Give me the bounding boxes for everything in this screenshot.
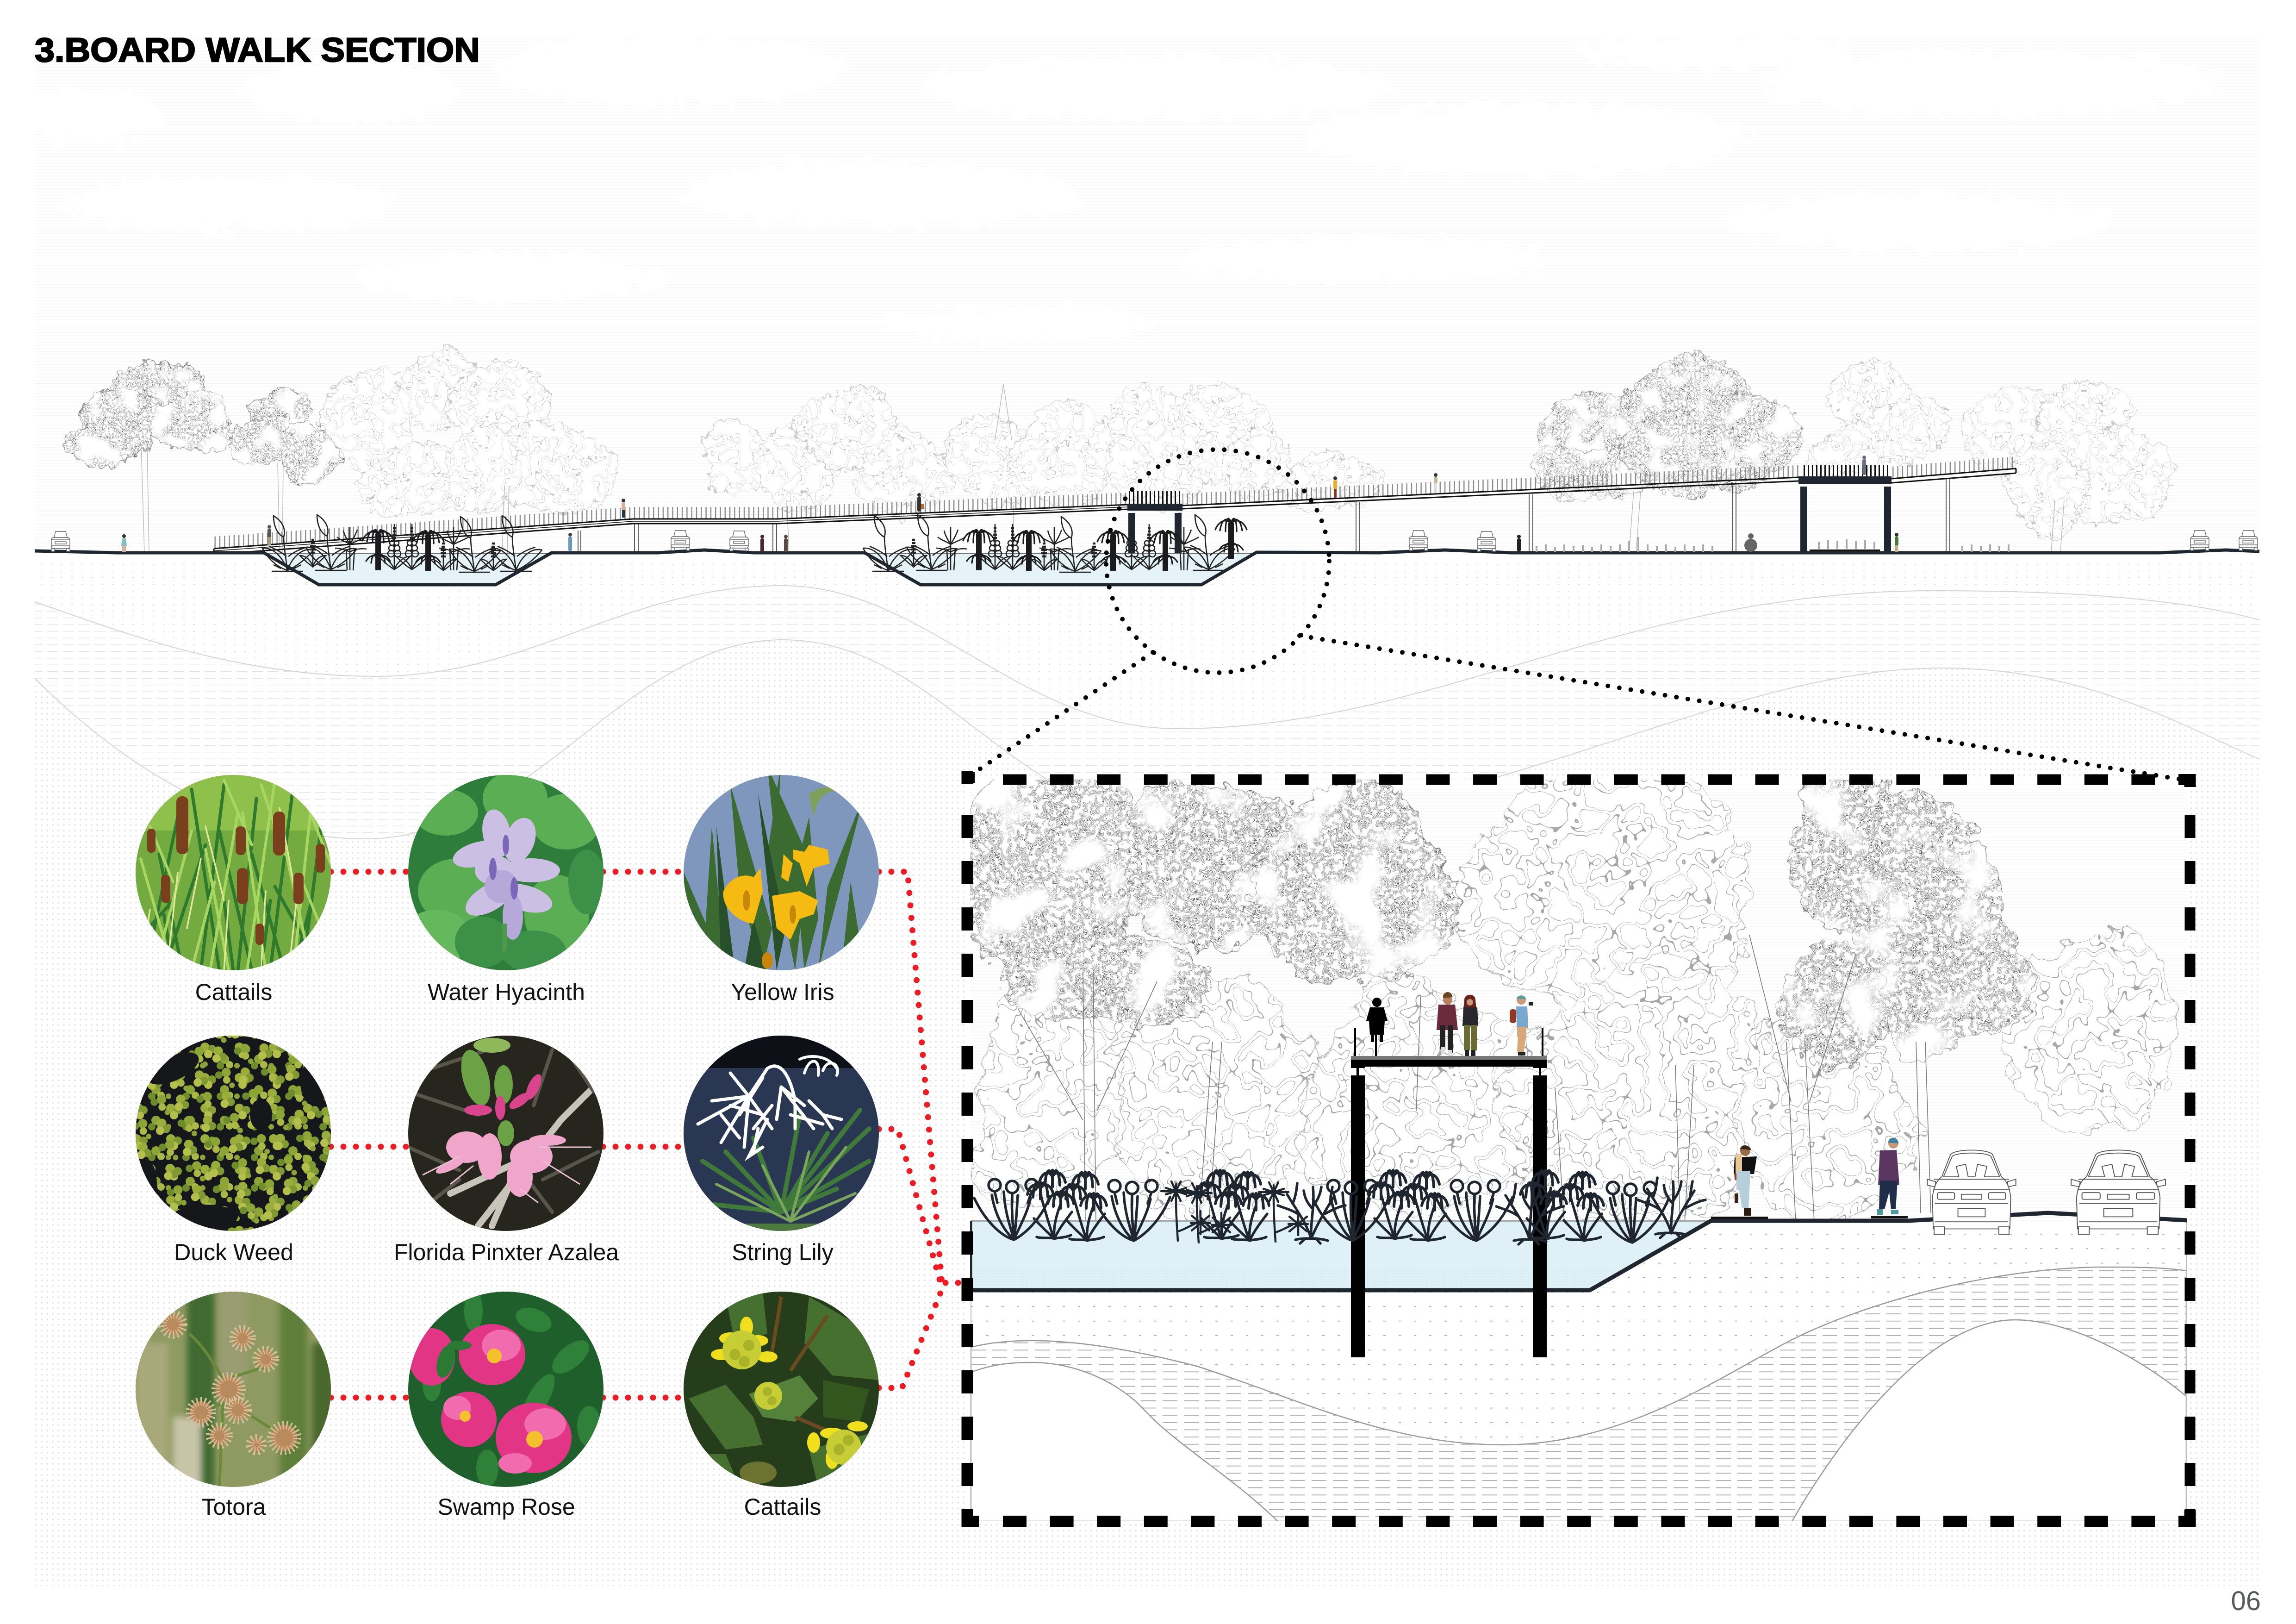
piers <box>578 479 1950 553</box>
plant: Swamp Rose <box>408 1290 604 1487</box>
structure: long boardwalk with railing and piers <box>214 456 2016 554</box>
understorey planting, right <box>1537 537 2009 552</box>
person: man in maroon hoodie <box>1437 992 1458 1056</box>
plant: Duck Weed <box>84 984 383 1283</box>
red dotted connectors <box>331 872 964 1398</box>
person: woman in dark jacket <box>1462 995 1478 1056</box>
dotted leader: circle to frame right corner <box>1300 636 2182 780</box>
plant: Cattails <box>136 775 331 970</box>
ground line with two basins <box>35 550 2259 585</box>
title: 3.BOARD WALK SECTION <box>35 31 480 69</box>
inset trees dense canopy <box>953 768 2013 1069</box>
inset ground and slope <box>970 1213 2187 1290</box>
inset water <box>971 1221 1711 1289</box>
inset soil <box>971 1222 2186 1521</box>
background: soil texture with wave strata <box>35 558 2259 1586</box>
railing <box>214 456 2016 549</box>
person: woman walking with scarf <box>1734 1145 1757 1216</box>
pavilion 2 <box>1798 476 1892 553</box>
plant: Totora <box>136 1292 335 1487</box>
dashed zoom frame <box>962 771 2195 1527</box>
wetland plants in basin 1 <box>262 515 542 572</box>
dotted leader: circle to frame left corner <box>971 652 1153 775</box>
inset trees light layer <box>963 764 2180 1227</box>
label: Florida Pinxter Azalea: Florida Pinxter Azalea <box>394 1239 619 1265</box>
plant: String Lily <box>684 1036 879 1231</box>
car 1 <box>1927 1150 2016 1234</box>
plant: Florida Pinxter Azalea <box>408 1036 604 1231</box>
person: cyclist <box>1366 998 1388 1056</box>
page number: 06 <box>2231 1586 2261 1616</box>
walkway slabs <box>1711 1216 1908 1219</box>
background: sky hatching <box>19 32 2259 554</box>
inset trunks <box>1018 935 1931 1222</box>
person: man with blue cap <box>1877 1138 1899 1215</box>
car 2 <box>2071 1150 2165 1234</box>
dotted magnifier circle <box>1106 450 1329 673</box>
small cars on long section <box>51 531 2258 551</box>
label: Duck Weed: Duck Weed <box>174 1239 293 1265</box>
trees behind long section: detailed canopies <box>65 356 342 479</box>
label: Water Hyacinth: Water Hyacinth <box>428 979 585 1005</box>
inset wetland plants <box>974 1170 1705 1244</box>
plant: Yellow Iris <box>684 762 879 970</box>
inset raised boardwalk deck and columns <box>1351 1028 1547 1357</box>
plant: Water Hyacinth <box>402 771 605 972</box>
tree cluster right: detailed canopy <box>1532 354 1796 502</box>
inset detail section <box>953 764 2187 1521</box>
inset background lines <box>970 787 2187 1222</box>
label: Swamp Rose: Swamp Rose <box>437 1494 575 1520</box>
person: photographer <box>1510 995 1533 1056</box>
basin water <box>264 554 1257 585</box>
tree trunks <box>141 384 2064 554</box>
water level lines <box>264 553 1257 554</box>
plant: Cattails (yellow flowers) <box>684 1292 879 1487</box>
trees behind long section: light outlines <box>329 350 2166 528</box>
wetland plants in basin 2 <box>863 515 1247 572</box>
small people on long section <box>121 456 1898 552</box>
deck lines <box>214 468 2016 554</box>
label: Totora: Totora <box>202 1494 266 1520</box>
label: Cattails (third row): Cattails <box>744 1494 821 1520</box>
label: String Lily: String Lily <box>732 1239 834 1265</box>
label: Cattails: Cattails <box>195 979 272 1005</box>
pavilion 1 <box>1127 504 1182 553</box>
label: Yellow Iris: Yellow Iris <box>731 979 834 1005</box>
